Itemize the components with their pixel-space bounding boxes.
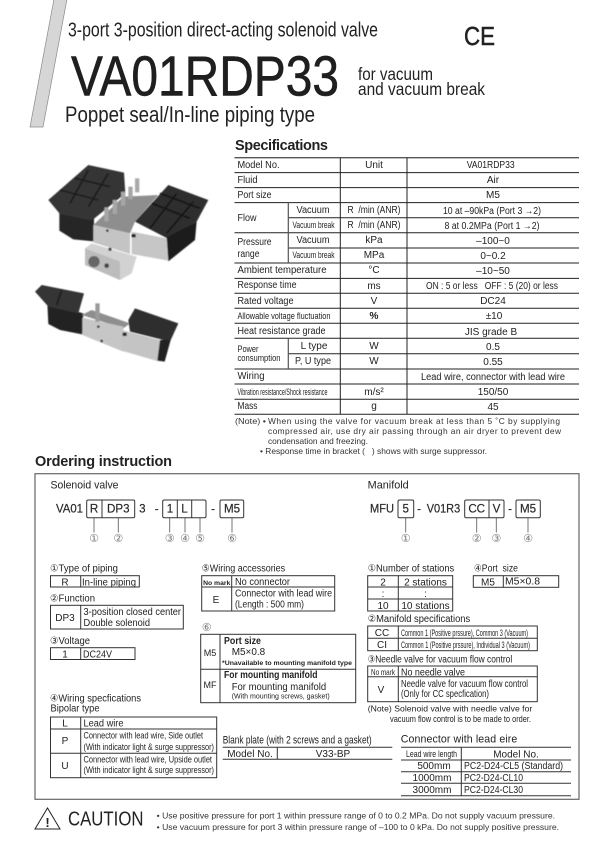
unit column: ms <box>367 281 381 292</box>
specification notes: When using the valve for vacuum break at less than 5 ˚C by supplying <box>268 416 560 426</box>
connector with lead wire table: Model No. <box>493 750 539 760</box>
option: wiring specifications <box>50 694 217 778</box>
option: type of piping: ①Type of piping <box>50 564 118 575</box>
option: voltage: 1 <box>62 650 68 660</box>
value column: VA01RDP33 <box>467 160 515 171</box>
value column: –100~0 <box>476 236 510 247</box>
option: wiring specifications: L <box>62 718 68 730</box>
option: manifold specifications: ②Manifold specifications <box>368 614 470 625</box>
manifold part number: 5 <box>402 503 409 516</box>
photo: single valve <box>35 285 178 362</box>
manifold part number <box>368 480 540 545</box>
title type line: Poppet seal/In-line piping type <box>65 102 315 127</box>
option: port size and mounting: For mounting manifold <box>224 670 318 681</box>
option: wiring accessories: (Length : 500 mm) <box>235 600 304 611</box>
blank plate table: Model No. <box>227 749 273 760</box>
row labels <box>238 160 330 412</box>
option: port size and mounting: M5×0.8 <box>232 647 266 658</box>
unit column: m/s² <box>364 387 384 398</box>
row labels: Ambient temperature <box>238 265 327 276</box>
solenoid valve part number: M5 <box>224 503 240 516</box>
option: needle valve: Needle valve for vacuum flow control <box>401 679 528 690</box>
unit column: R /min (ANR) <box>348 205 400 216</box>
option: port size and mounting: MF <box>204 680 217 690</box>
option: wiring specifications: ④Wiring specfications <box>50 694 141 705</box>
row labels: Heat resistance grade <box>238 326 326 337</box>
option: port size and mounting: ⑥ <box>202 621 212 634</box>
unit column: g <box>371 401 377 412</box>
title qualifier: and vacuum break <box>358 79 485 99</box>
row labels: consumption <box>238 352 280 363</box>
solenoid valve part number: ⑤ <box>195 532 205 545</box>
unit column: Unit <box>365 160 383 171</box>
solenoid valve part number: ④ <box>180 532 190 545</box>
row labels: Fluid <box>238 175 258 186</box>
value column: 0.5 <box>486 342 500 353</box>
option: type of piping <box>50 564 139 588</box>
option: manifold specifications <box>368 614 537 651</box>
manifold part number: ④ <box>523 532 533 545</box>
specification notes: compressed air, use dry air passing through an air dryer to prevent dew <box>268 426 562 436</box>
connector with lead wire table: Connector with lead eire <box>401 734 517 746</box>
option: wiring accessories: Connector with lead wire <box>235 589 332 600</box>
value column: 8 at 0.2MPa (Port 1 →2) <box>444 221 540 232</box>
blank plate table: Blank plate (with 2 screws and a gasket) <box>223 734 372 746</box>
option: wiring specifications: U <box>61 761 69 772</box>
specifications table <box>234 158 579 414</box>
solenoid valve part number: - <box>155 503 159 516</box>
CE mark: CE <box>464 21 495 51</box>
option: wiring specifications: (With indicator light & surge suppressor) <box>84 741 214 752</box>
solenoid valve part number: R <box>90 503 98 516</box>
option: wiring specifications: (With indicator light & surge suppressor) <box>84 764 214 775</box>
option: port size and mounting: M5 <box>204 648 216 658</box>
option: manifold specifications: Common 1 (Positive prssure), Common 3 (Vacuum) <box>401 628 528 638</box>
value column: ON : 5 or less OFF : 5 (20) or less <box>426 281 558 292</box>
value column: 150/50 <box>478 387 509 398</box>
row labels: Allowable voltage fluctuation <box>238 311 330 322</box>
sub-row labels: L type <box>301 341 328 352</box>
option: number of stations: 2 <box>380 578 386 588</box>
sub-row labels: Vacuum break <box>292 219 335 230</box>
connector with lead wire table: PC2-D24-CL5 (Standard) <box>464 761 563 772</box>
option: voltage: ③Voltage <box>50 636 90 647</box>
title qualifier: for vacuum <box>358 64 433 84</box>
unit column <box>348 160 400 412</box>
sub-row labels <box>292 205 335 367</box>
option: number of stations: ①Number of stations <box>368 564 454 575</box>
heading: ordering instruction: Ordering instruction <box>35 454 172 470</box>
value column: DC24 <box>480 296 506 307</box>
row labels: Pressure <box>238 237 272 248</box>
photo: manifold assembly <box>48 165 208 280</box>
connector with lead wire table: Lead wire length <box>406 749 457 759</box>
value column: Lead wire, connector with lead wire <box>421 372 565 383</box>
connector with lead wire table: PC2-D24-CL30 <box>464 785 523 796</box>
manifold note: vacuum flow control is to be made to order. <box>390 714 531 724</box>
solenoid valve part number <box>50 480 244 545</box>
row labels: Response time <box>238 280 297 291</box>
option: wiring accessories: No connector <box>235 577 291 588</box>
caution icon: ! <box>45 815 50 830</box>
caution text: • Use positive pressure for port 1 within pressure range of 0 to 0.2 MPa. Do not supply vacuum pressure. <box>157 810 555 820</box>
manifold part number: MFU <box>370 503 394 516</box>
option: wiring accessories: No mark <box>203 580 231 587</box>
solenoid valve part number: ② <box>113 532 123 545</box>
manifold part number: ③ <box>491 532 501 545</box>
row labels: Rated voltage <box>238 296 294 307</box>
solenoid valve part number: - <box>211 503 215 516</box>
row labels: Wiring <box>238 371 264 382</box>
connector with lead wire table: PC2-D24-CL10 <box>464 773 523 784</box>
option: wiring accessories: ⑤Wiring accessories <box>202 564 285 575</box>
specification notes: (Note) • <box>235 416 266 426</box>
specification notes: • Response time in bracket ( ) shows with surge suppressor. <box>260 446 487 456</box>
option: port size and mounting: For mounting manifold <box>232 682 326 693</box>
row labels: range <box>238 249 260 260</box>
option: number of stations: 10 stations <box>401 601 450 612</box>
option: function: 3-position closed center <box>84 607 182 618</box>
manifold note: (Note) Solenoid valve with needle valve for <box>368 704 532 714</box>
unit column: W <box>369 356 379 367</box>
option: manifold specifications: Common 1 (Positive prssure), Individual 3 (Vacuum) <box>401 640 530 650</box>
row labels: Power <box>238 343 258 354</box>
blank plate table: V33-BP <box>316 749 351 760</box>
option: manifold specifications: CC <box>375 628 389 639</box>
manifold part number: - <box>417 503 421 516</box>
unit column: MPa <box>364 250 385 261</box>
option: manifold port size: ④Port size <box>474 564 518 575</box>
option: function <box>50 594 183 629</box>
option: wiring specifications: Lead wire <box>84 718 124 730</box>
heading: specifications: Specifications <box>235 138 328 154</box>
option: function: DP3 <box>55 613 75 624</box>
value column <box>421 160 565 413</box>
option: needle valve: No mark <box>371 667 396 677</box>
sub-row labels: Vacuum <box>296 235 330 246</box>
solenoid valve part number: L <box>181 503 188 516</box>
solenoid valve part number: ① <box>89 532 99 545</box>
option: voltage <box>50 636 135 660</box>
blank plate table <box>223 734 392 760</box>
manifold part number: CC <box>468 503 485 516</box>
option: wiring specifications: Connector with lead wire, Side outlet <box>84 729 203 740</box>
manifold part number: - <box>508 503 512 516</box>
value column: –10~50 <box>476 266 510 277</box>
row labels: Model No. <box>238 160 280 171</box>
unit column: W <box>369 341 379 352</box>
caution text <box>157 810 559 832</box>
solenoid valve part number: ③ <box>165 532 175 545</box>
option: port size and mounting: Port size <box>224 636 261 647</box>
unit column: R /min (ANR) <box>348 220 400 231</box>
option: needle valve: ③Needle valve for vacuum flow control <box>368 654 512 665</box>
manifold part number: ① <box>401 532 411 545</box>
manifold note <box>368 704 532 724</box>
value column: 45 <box>487 402 499 413</box>
decorative slash band <box>30 0 67 127</box>
sub-row labels: Vacuum <box>296 205 330 216</box>
option: needle valve <box>368 654 537 702</box>
solenoid valve part number: VA01 <box>56 503 83 516</box>
title model number: VA01RDP33 <box>71 44 339 108</box>
option: wiring specifications: P <box>62 736 69 747</box>
row labels: Port size <box>238 190 272 201</box>
value column: 0.55 <box>483 357 503 368</box>
solenoid valve part number: ⑥ <box>227 532 237 545</box>
caution heading: CAUTION <box>68 809 144 831</box>
option: function: Double solenoid <box>84 618 150 629</box>
option: needle valve: No needle valve <box>401 668 465 678</box>
connector with lead wire table: 500mm <box>417 761 451 772</box>
option: wiring specifications: Connector with lead wire, Upside outlet <box>84 754 212 765</box>
option: needle valve: (Only for CC specfication) <box>401 689 489 700</box>
solenoid valve part number: Solenoid valve <box>50 480 119 492</box>
option: needle valve: V <box>378 685 385 696</box>
manifold part number: M5 <box>520 503 536 516</box>
manifold part number: Manifold <box>368 480 409 492</box>
manifold part number: ② <box>472 532 482 545</box>
unit column: % <box>370 311 379 322</box>
solenoid valve part number: 1 <box>167 503 173 516</box>
title qualifier <box>358 64 485 99</box>
connector with lead wire table: 1000mm <box>413 773 451 784</box>
option: number of stations: 10 <box>377 601 389 612</box>
option: wiring specifications: Bipolar type <box>50 704 100 715</box>
option: port size and mounting: (With mounting screws, gasket) <box>232 692 330 700</box>
specification notes <box>235 416 562 456</box>
value column: 10 at –90kPa (Port 3 →2) <box>443 206 541 217</box>
option: function: ②Function <box>50 594 95 605</box>
option: number of stations: : <box>424 589 427 600</box>
option: voltage: DC24V <box>83 650 112 660</box>
value column: Air <box>487 175 500 186</box>
specification notes: condensation and freezing. <box>268 436 368 446</box>
sub-row labels: P, U type <box>295 356 331 367</box>
value column: M5 <box>486 190 500 201</box>
caution text: • Use vacuum pressure for port 3 within pressure range of –100 to 0 kPa. Do not supply positive pressure. <box>157 822 559 832</box>
option: wiring accessories <box>202 564 335 611</box>
row labels: Mass <box>238 401 258 412</box>
connector with lead wire table: 3000mm <box>413 785 451 796</box>
option: port size and mounting <box>201 621 356 703</box>
unit column: kPa <box>365 235 383 246</box>
manifold part number: V <box>493 503 501 516</box>
option: type of piping: R <box>61 578 69 588</box>
value column: JIS grade B <box>465 327 517 338</box>
product photos <box>35 165 208 362</box>
value column: ±10 <box>486 311 503 322</box>
subtitle: 3-port 3-position direct-acting solenoid valve <box>68 20 378 42</box>
option: manifold port size: M5×0.8 <box>505 576 540 588</box>
solenoid valve part number: 3 <box>139 503 146 516</box>
option: type of piping: In-line piping <box>82 578 136 588</box>
option: manifold specifications: CI <box>377 640 387 651</box>
value column: 0~0.2 <box>480 251 506 262</box>
option: manifold port size: M5 <box>481 578 495 588</box>
unit column: V <box>371 296 378 307</box>
unit column: °C <box>368 265 380 276</box>
sub-row labels: Vacuum break <box>292 249 335 260</box>
connector with lead wire table <box>401 734 571 796</box>
row labels: Flow <box>238 213 257 224</box>
manifold part number: V01R3 <box>427 503 460 516</box>
row labels: Vibration resistance/Shock resistance <box>238 386 328 397</box>
option: number of stations: : <box>382 589 384 600</box>
solenoid valve part number: DP3 <box>107 503 130 516</box>
ordering panel frame <box>35 474 579 799</box>
option: number of stations <box>368 564 454 612</box>
option: number of stations: 2 stations <box>404 578 447 588</box>
option: manifold port size <box>473 564 559 588</box>
caution icon <box>35 808 60 830</box>
option: wiring accessories: E <box>213 595 220 606</box>
option: port size and mounting: *Unavailable to mounting manifold type <box>222 660 352 667</box>
